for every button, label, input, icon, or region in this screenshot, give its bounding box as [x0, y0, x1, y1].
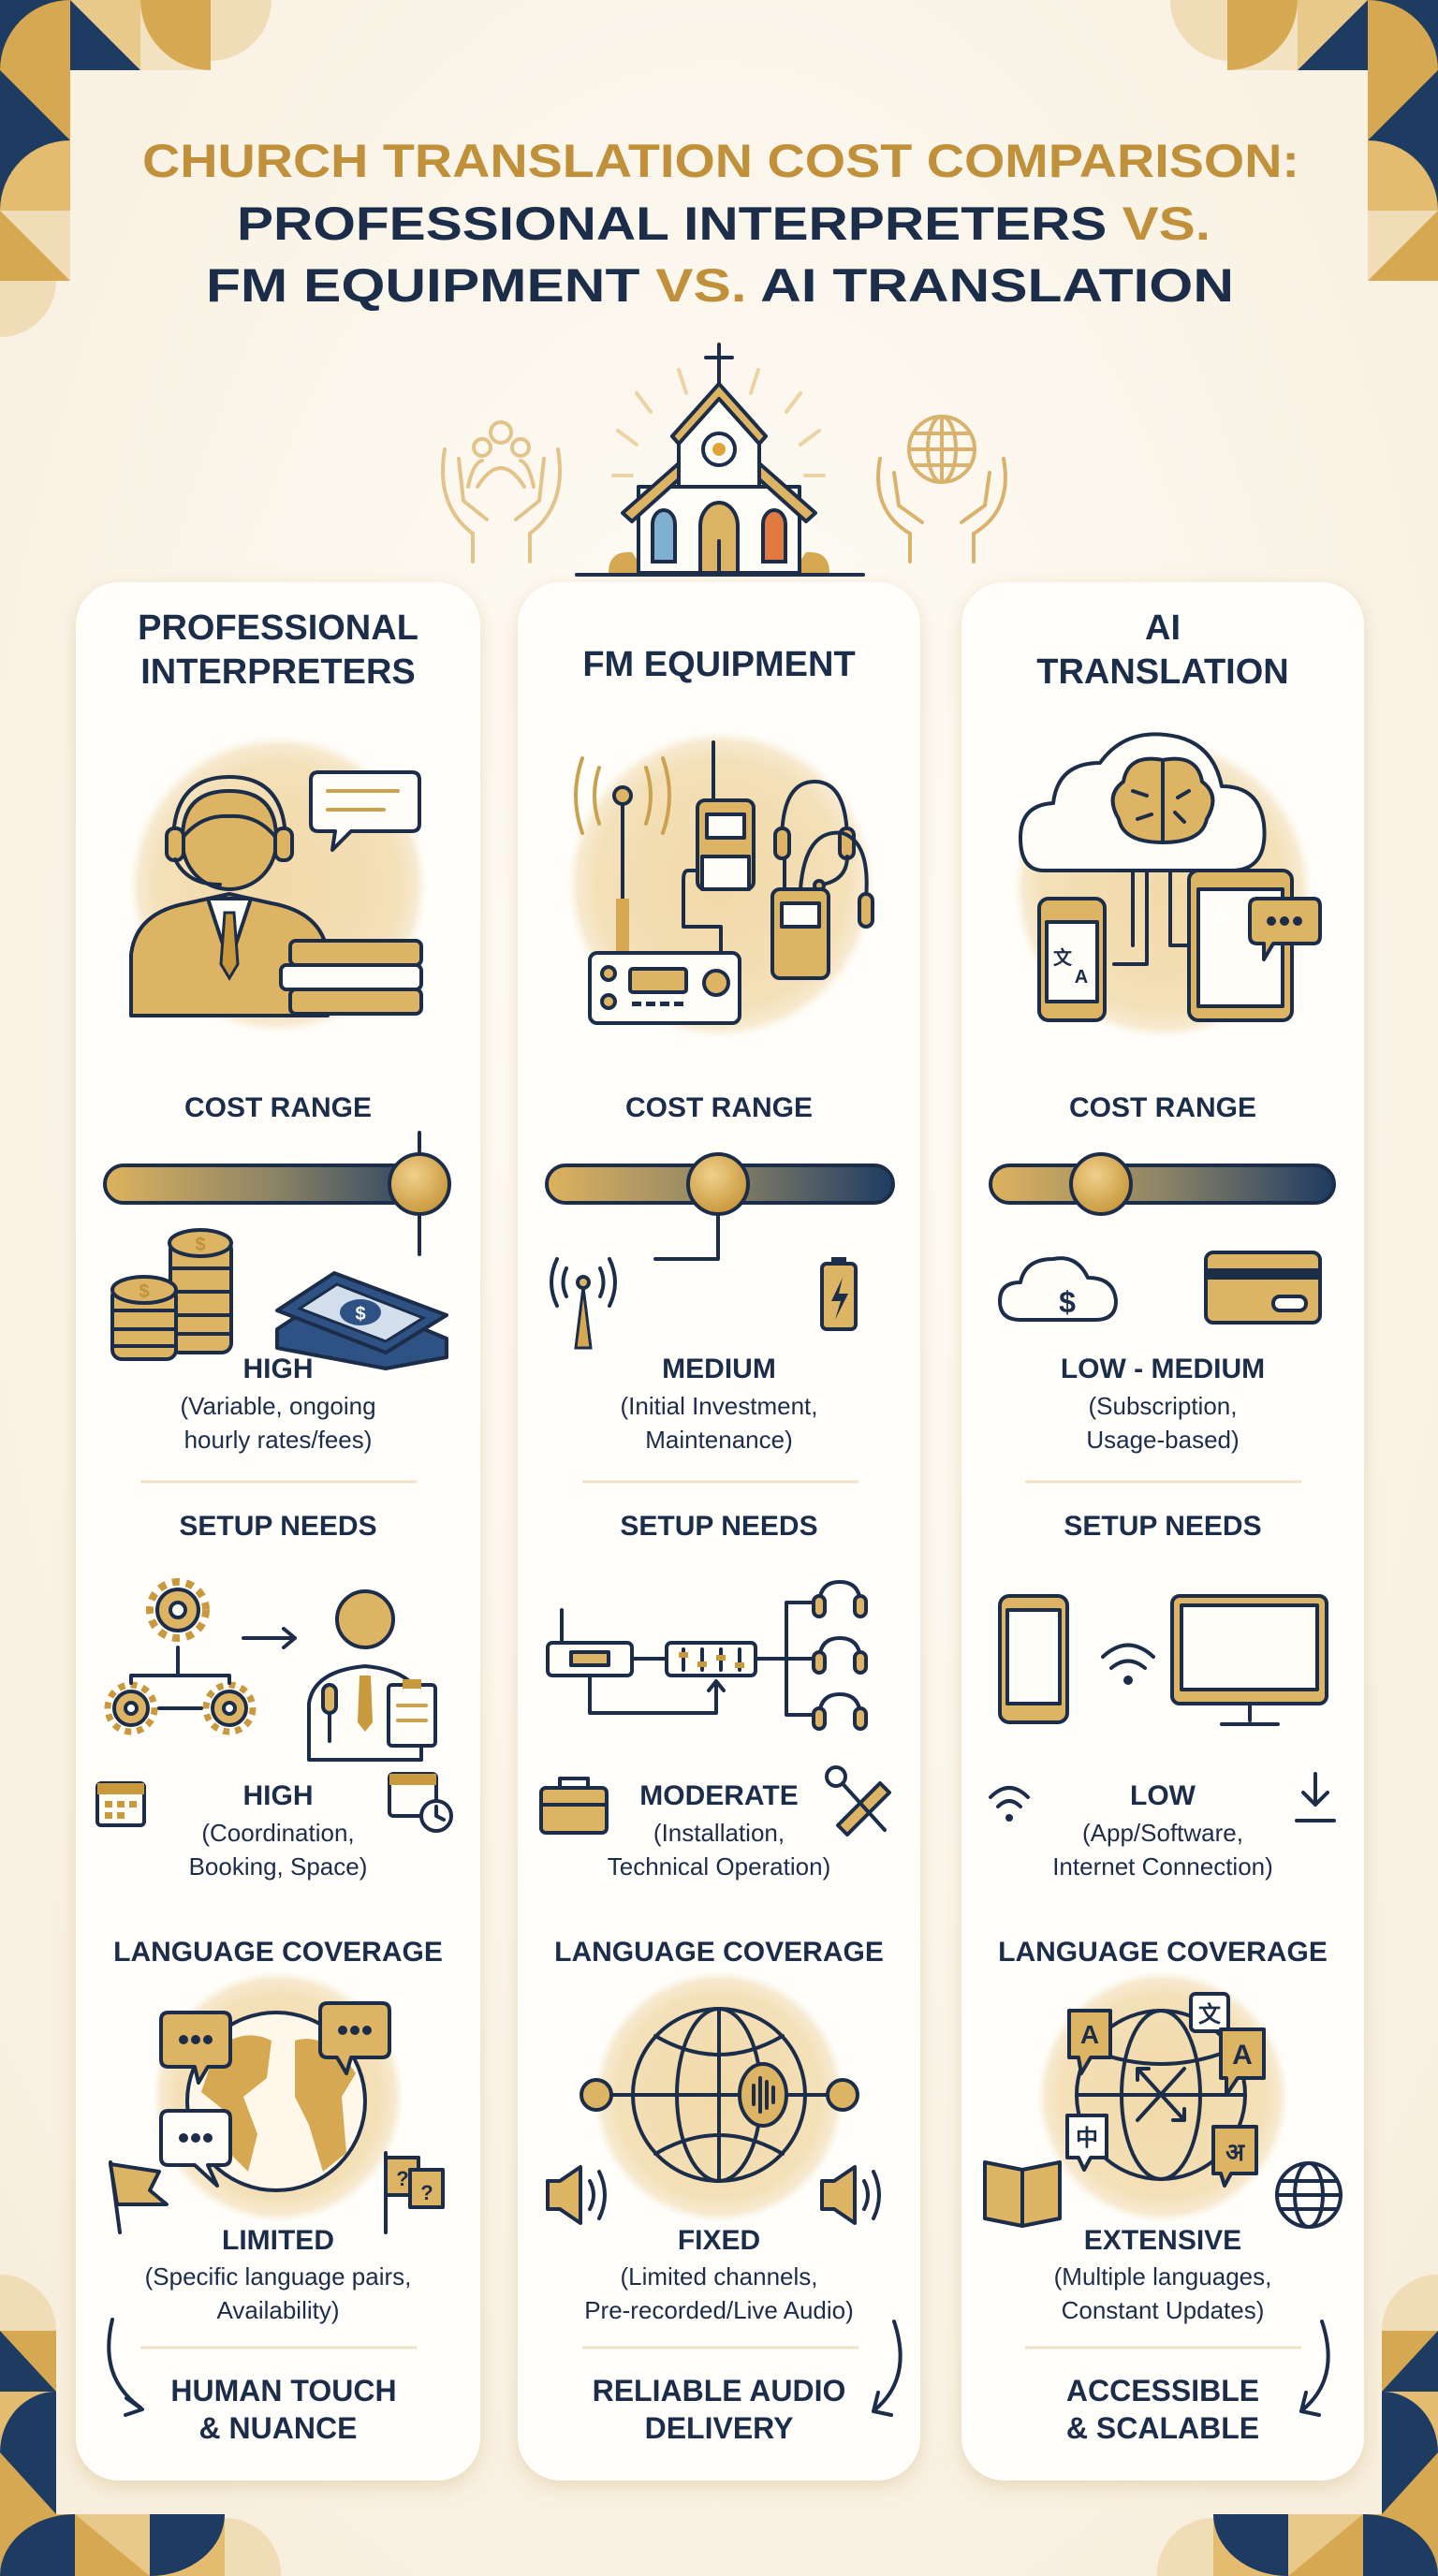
label: high setup: Booking, Space) — [189, 1852, 367, 1881]
label: low setup: (App/Software, — [1082, 1819, 1243, 1847]
icon: cloud brain devices — [1013, 734, 1320, 1039]
icon: coins and cash: $ — [355, 1304, 366, 1325]
icon: globe with many languages: 中 — [1076, 2126, 1098, 2151]
title — [142, 135, 1299, 312]
icon: hands holding people — [443, 422, 560, 562]
icon: globe with speech bubbles — [110, 1970, 443, 2232]
icon: coins and cash — [112, 1230, 447, 1368]
heading: language coverage: LANGUAGE COVERAGE — [113, 1937, 443, 1968]
icon: church with rays — [577, 344, 863, 575]
label: limited — [145, 2225, 411, 2324]
heading: AI translation: AI — [1145, 608, 1181, 648]
label: extensive: (Multiple languages, — [1054, 2262, 1271, 2291]
icon: globe with speech bubbles: ? — [420, 2181, 433, 2204]
title: CHURCH TRANSLATION COST COMPARISON: — [142, 135, 1299, 187]
slider: low-medium — [990, 1154, 1334, 1214]
icon: credit card — [1206, 1252, 1320, 1323]
icon: FM transmitter and receivers — [566, 730, 875, 1039]
heading: cost range: COST RANGE — [625, 1092, 813, 1123]
label: extensive: Constant Updates) — [1062, 2296, 1264, 2324]
label: high cost: hourly rates/fees) — [184, 1426, 372, 1454]
decoration: bottom-right corner pattern — [1157, 2275, 1438, 2576]
label: accessible: & SCALABLE — [1066, 2411, 1259, 2445]
label: low setup — [1052, 1780, 1273, 1881]
label: medium cost: MEDIUM — [662, 1354, 776, 1384]
label: high setup: (Coordination, — [201, 1819, 355, 1847]
icon: globe with many languages: A — [1232, 2040, 1253, 2071]
icon: globe with many languages: A — [1080, 2020, 1099, 2049]
icon: antenna — [551, 1259, 615, 1348]
label: fixed: (Limited channels, — [620, 2262, 818, 2291]
label: extensive — [1054, 2225, 1271, 2324]
decoration: bottom-left corner pattern — [0, 2275, 281, 2576]
label: limited: (Specific language pairs, — [145, 2262, 411, 2291]
icon: wifi and download — [990, 1774, 1334, 1822]
icon: globe with many languages — [985, 1970, 1341, 2227]
slider: high — [105, 1133, 449, 1254]
heading: setup needs: SETUP NEEDS — [1064, 1511, 1262, 1542]
label: reliable audio: DELIVERY — [645, 2411, 793, 2445]
label: limited: LIMITED — [222, 2225, 334, 2256]
heading: language coverage: LANGUAGE COVERAGE — [554, 1937, 884, 1968]
label: moderate setup — [608, 1780, 830, 1881]
panel: AI translation — [961, 582, 1364, 2481]
heading: FM equipment: FM EQUIPMENT — [582, 645, 856, 684]
icon: cloud brain devices: A — [1075, 967, 1088, 988]
arrow: curved right — [1301, 2321, 1328, 2415]
label: high setup — [189, 1780, 367, 1881]
icon: battery — [822, 1257, 856, 1329]
label: high cost — [180, 1354, 376, 1454]
label: low setup: LOW — [1130, 1780, 1196, 1811]
label: low setup: Internet Connection) — [1052, 1852, 1273, 1881]
label: human touch: HUMAN TOUCH — [170, 2374, 397, 2408]
icon: gears to person — [108, 1582, 435, 1760]
panel: FM equipment — [518, 582, 920, 2481]
label: fixed — [584, 2225, 854, 2324]
title: PROFESSIONAL INTERPRETERS VS. — [237, 198, 1211, 250]
icon: calendars — [97, 1774, 451, 1831]
label: low-medium cost: (Subscription, — [1089, 1392, 1237, 1420]
label: fixed: Pre-recorded/Live Audio) — [584, 2296, 854, 2324]
heading: setup needs: SETUP NEEDS — [620, 1511, 818, 1542]
icon: interpreter with headset — [128, 735, 428, 1034]
icon: toolbox — [541, 1778, 607, 1833]
label: reliable audio: RELIABLE AUDIO — [593, 2374, 845, 2408]
icon: wrench and screwdriver — [827, 1767, 889, 1835]
icon: phone wifi monitor — [1000, 1596, 1327, 1724]
slider: medium — [547, 1154, 893, 1259]
icon: receiver to mixer to headphones — [548, 1582, 866, 1729]
label: medium cost — [621, 1354, 817, 1454]
label: accessible: ACCESSIBLE — [1066, 2374, 1259, 2408]
label: high setup: HIGH — [243, 1780, 313, 1811]
icon: hands holding globe — [878, 417, 1005, 562]
heading: setup needs: SETUP NEEDS — [179, 1511, 377, 1542]
heading: language coverage: LANGUAGE COVERAGE — [998, 1937, 1328, 1968]
label: moderate setup: MODERATE — [639, 1780, 799, 1811]
icon: globe with many languages: अ — [1225, 2138, 1245, 2166]
label: high cost: HIGH — [243, 1354, 313, 1384]
decoration: top-right corner pattern — [1170, 0, 1438, 281]
icon: globe with audio channel — [548, 1970, 879, 2223]
title: FM EQUIPMENT VS. AI TRANSLATION — [206, 259, 1234, 312]
label: fixed: FIXED — [678, 2225, 760, 2256]
heading: professional interpreters: INTERPRETERS — [140, 652, 416, 692]
label: medium cost: (Initial Investment, — [621, 1392, 817, 1420]
icon: globe with many languages: 文 — [1198, 2001, 1222, 2027]
label: medium cost: Maintenance) — [645, 1426, 793, 1454]
label: limited: Availability) — [216, 2296, 340, 2324]
label: moderate setup: (Installation, — [653, 1819, 785, 1847]
arrow: curved right — [873, 2321, 901, 2415]
icon: cloud dollar — [1000, 1258, 1116, 1320]
heading: professional interpreters: PROFESSIONAL — [138, 608, 418, 648]
label: low-medium cost: LOW - MEDIUM — [1061, 1354, 1265, 1384]
label: low-medium cost — [1061, 1354, 1265, 1454]
icon: globe with speech bubbles: ? — [396, 2167, 409, 2190]
icon: cloud dollar: $ — [1059, 1285, 1076, 1319]
icon: coins and cash: $ — [139, 1281, 150, 1302]
label: moderate setup: Technical Operation) — [608, 1852, 830, 1881]
icon: cloud brain devices: A — [1211, 902, 1232, 933]
heading: AI translation: TRANSLATION — [1036, 652, 1289, 692]
label: human touch: & NUANCE — [199, 2411, 357, 2445]
label: low-medium cost: Usage-based) — [1086, 1426, 1240, 1454]
arrow: curved left — [109, 2320, 142, 2415]
heading: cost range: COST RANGE — [184, 1092, 372, 1123]
panel: professional interpreters — [76, 582, 480, 2481]
label: high cost: (Variable, ongoing — [180, 1392, 376, 1420]
icon: coins and cash: $ — [195, 1235, 206, 1255]
label: extensive: EXTENSIVE — [1084, 2225, 1241, 2256]
heading: cost range: COST RANGE — [1069, 1092, 1256, 1123]
decoration: top-left corner pattern — [0, 0, 271, 337]
icon: cloud brain devices: 文 — [1053, 946, 1073, 969]
